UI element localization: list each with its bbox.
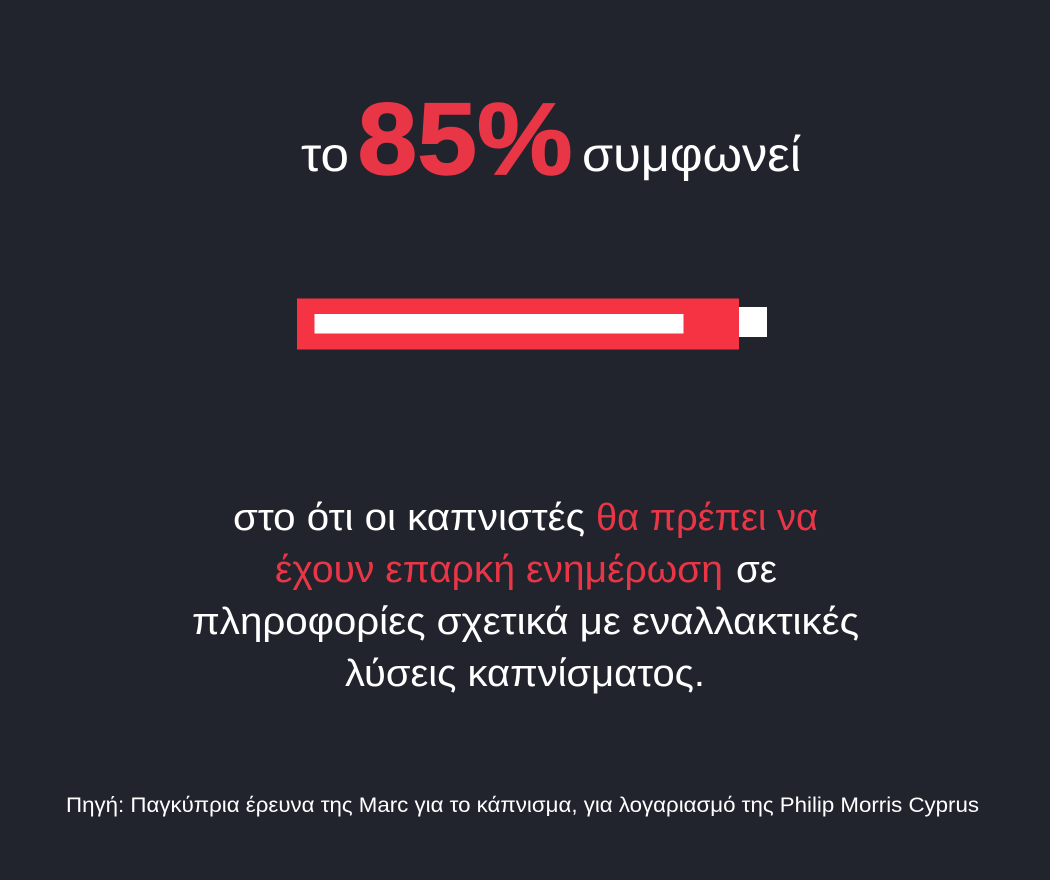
title [301, 82, 801, 196]
title: συμφωνεί [582, 129, 801, 182]
text block: description: λύσεις καπνίσματος. [345, 653, 705, 695]
text block: description: έχουν επαρκή ενημέρωση [275, 549, 723, 591]
title: 85% [358, 82, 572, 196]
title: το [301, 129, 349, 182]
text block: description: στο ότι οι καπνιστές [233, 497, 585, 539]
source note: Πηγή: Παγκύπρια έρευνα της Marc για το κάπνισμα, για λογαριασμό της Philip Morris Cyprus [66, 794, 979, 817]
text block: description: θα πρέπει να [596, 497, 818, 539]
icon: cigarette progress bar [297, 298, 767, 350]
text block: description [192, 497, 859, 695]
text block: description: πληροφορίες σχετικά με εναλλακτικές [192, 601, 859, 643]
text block: description: σε [736, 549, 777, 591]
